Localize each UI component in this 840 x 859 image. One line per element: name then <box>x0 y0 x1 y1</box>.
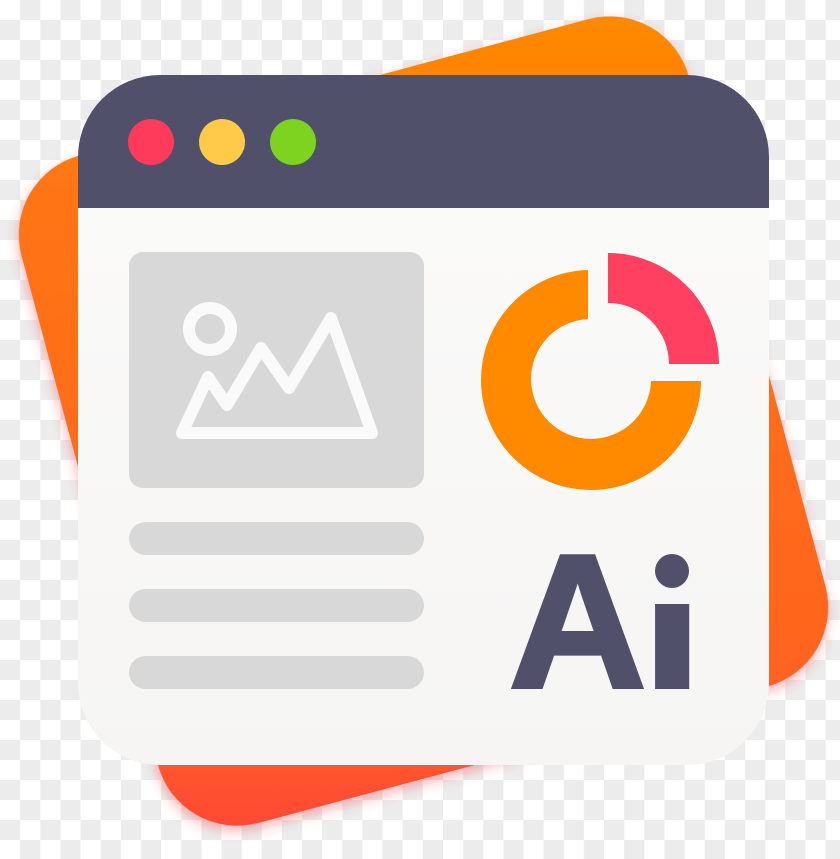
orange donut segment <box>481 270 701 490</box>
icon: sun circle <box>189 308 231 350</box>
window body <box>78 75 769 765</box>
icon: mountains <box>182 318 372 433</box>
text line placeholders <box>129 522 424 689</box>
Ai logotype: i <box>638 544 707 724</box>
image placeholder <box>129 252 424 488</box>
Ai logotype <box>510 554 690 689</box>
donut chart <box>481 253 719 490</box>
Ai logotype: A <box>509 516 646 728</box>
browser window <box>78 75 769 765</box>
window title bar <box>78 75 769 208</box>
red donut segment <box>608 253 719 364</box>
window control dots <box>128 119 316 165</box>
